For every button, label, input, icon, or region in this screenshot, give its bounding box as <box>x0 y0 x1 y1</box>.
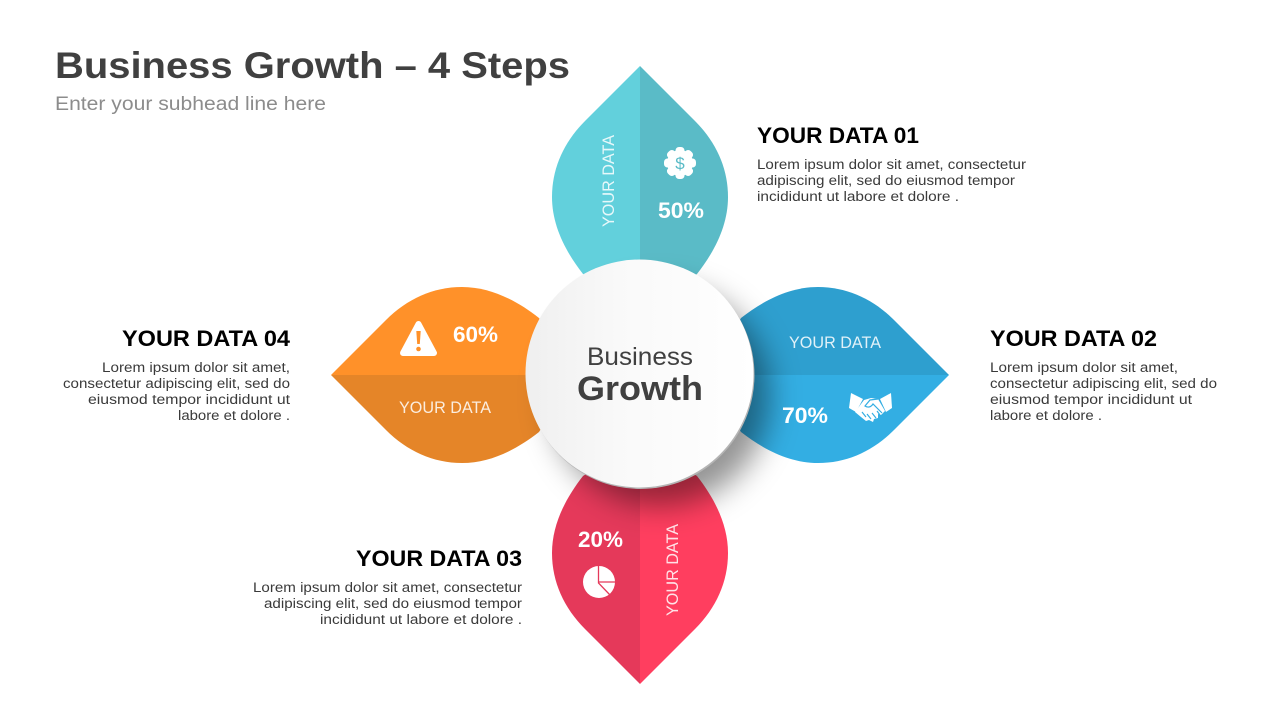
petal label: YOUR DATA left: YOUR DATA <box>399 398 492 417</box>
value: 50%: 50% <box>658 198 704 223</box>
petal: step 01 teal <box>552 66 728 310</box>
body: data 04 <box>63 360 290 423</box>
body: data 01 <box>757 157 1027 204</box>
icon: gear with dollar: $ <box>675 154 685 173</box>
body: data 04: Lorem ipsum dolor sit amet, <box>102 360 290 375</box>
petal label: YOUR DATA right: YOUR DATA <box>789 333 882 352</box>
icon: handshake <box>849 393 892 422</box>
heading: data 01: YOUR DATA 01 <box>757 123 919 148</box>
body: data 01: adipiscing elit, sed do eiusmod tempor <box>757 173 1016 188</box>
value: 70%: 70% <box>782 403 828 428</box>
text block: data 04 <box>63 326 291 423</box>
icon: warning triangle <box>403 324 434 353</box>
heading: data 02: YOUR DATA 02 <box>990 326 1157 351</box>
body: data 02: Lorem ipsum dolor sit amet, <box>990 360 1178 375</box>
body: data 01: Lorem ipsum dolor sit amet, consectetur <box>757 157 1027 172</box>
text block: data 02 <box>990 326 1217 423</box>
body: data 02: consectetur adipiscing elit, sed do <box>990 376 1217 391</box>
value: 60%: 60% <box>453 322 498 347</box>
body: data 02: eiusmod tempor incididunt ut <box>990 392 1192 407</box>
petal: step 02 blue <box>705 287 949 463</box>
body: data 03: adipiscing elit, sed do eiusmod tempor <box>264 596 523 611</box>
body: data 03: incididunt ut labore et dolore . <box>320 612 522 627</box>
body: data 03 <box>253 580 523 627</box>
petal: step 04 orange <box>331 287 575 463</box>
body: data 02: labore et dolore . <box>990 408 1102 423</box>
text block: data 01 <box>757 123 1027 204</box>
text block: data 03 <box>253 546 523 627</box>
body: data 02 <box>990 360 1217 423</box>
centre label: Growth: Growth <box>577 370 703 408</box>
icon: gear with dollar <box>664 147 696 179</box>
centre circle shadow <box>550 286 770 506</box>
centre circle <box>526 260 754 489</box>
petal label: YOUR DATA bottom: YOUR DATA <box>663 523 682 616</box>
subtitle: Enter your subhead line here <box>55 94 326 115</box>
body: data 04: consectetur adipiscing elit, sed do <box>63 376 290 391</box>
title: Business Growth – 4 Steps <box>55 45 570 86</box>
centre label: Business: Business <box>587 343 693 371</box>
petal: step 03 red <box>552 440 728 684</box>
body: data 04: labore et dolore . <box>178 408 290 423</box>
body: data 03: Lorem ipsum dolor sit amet, consectetur <box>253 580 523 595</box>
value: 20%: 20% <box>578 527 623 552</box>
body: data 01: incididunt ut labore et dolore . <box>757 189 959 204</box>
body: data 04: eiusmod tempor incididunt ut <box>88 392 290 407</box>
petal label: YOUR DATA top: YOUR DATA <box>599 134 618 227</box>
heading: data 04: YOUR DATA 04 <box>122 326 291 351</box>
icon: pie chart <box>583 566 616 598</box>
heading: data 03: YOUR DATA 03 <box>356 546 522 571</box>
